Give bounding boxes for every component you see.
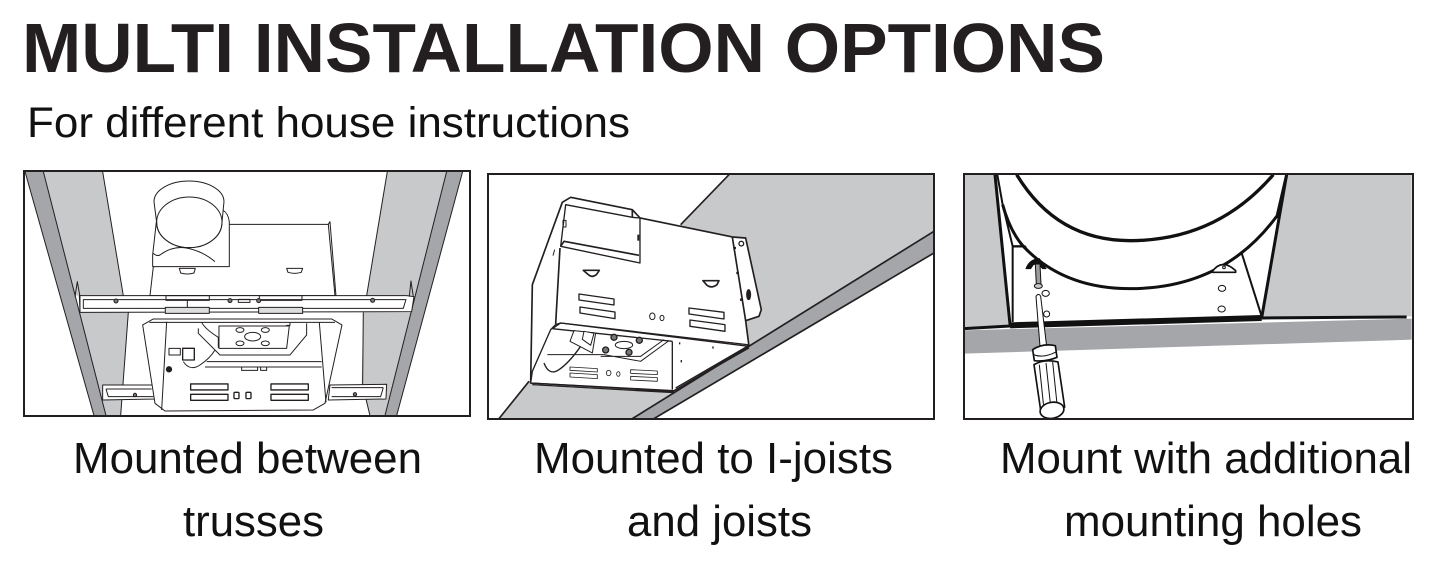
fan housing	[531, 197, 761, 391]
caption 1: trusses	[183, 497, 324, 546]
joist and sill	[964, 175, 1412, 354]
panel: mounted between trusses	[25, 172, 463, 416]
open fan housing	[143, 319, 342, 411]
open panel	[531, 323, 749, 393]
caption 3: Mount with additional	[1000, 434, 1412, 483]
duct collar	[153, 181, 229, 267]
joist	[499, 175, 934, 419]
fan housing back	[150, 222, 336, 296]
upper mounting bar	[75, 281, 414, 313]
title: MULTI INSTALLATION OPTIONS	[22, 9, 1105, 87]
mounting slots and holes	[1026, 259, 1236, 317]
caption 2: and joists	[627, 497, 812, 546]
joist right	[362, 172, 463, 416]
caption 2	[534, 434, 893, 546]
panel: mounted to I-joists	[499, 175, 934, 419]
joist left	[25, 172, 128, 416]
caption 1	[73, 434, 422, 546]
caption 3	[1000, 434, 1412, 546]
housing and duct	[995, 175, 1287, 325]
screwdriver	[1033, 264, 1065, 420]
panel frame 3	[964, 174, 1413, 419]
panel frame 2	[488, 174, 934, 419]
lower mounting bars	[103, 384, 387, 400]
caption 3: mounting holes	[1064, 497, 1362, 546]
caption 2: Mounted to I-joists	[534, 434, 893, 483]
panel: additional mounting holes	[964, 175, 1412, 420]
subtitle: For different house instructions	[27, 99, 630, 147]
caption 1: Mounted between	[73, 434, 422, 483]
panel frame 1	[24, 171, 470, 416]
